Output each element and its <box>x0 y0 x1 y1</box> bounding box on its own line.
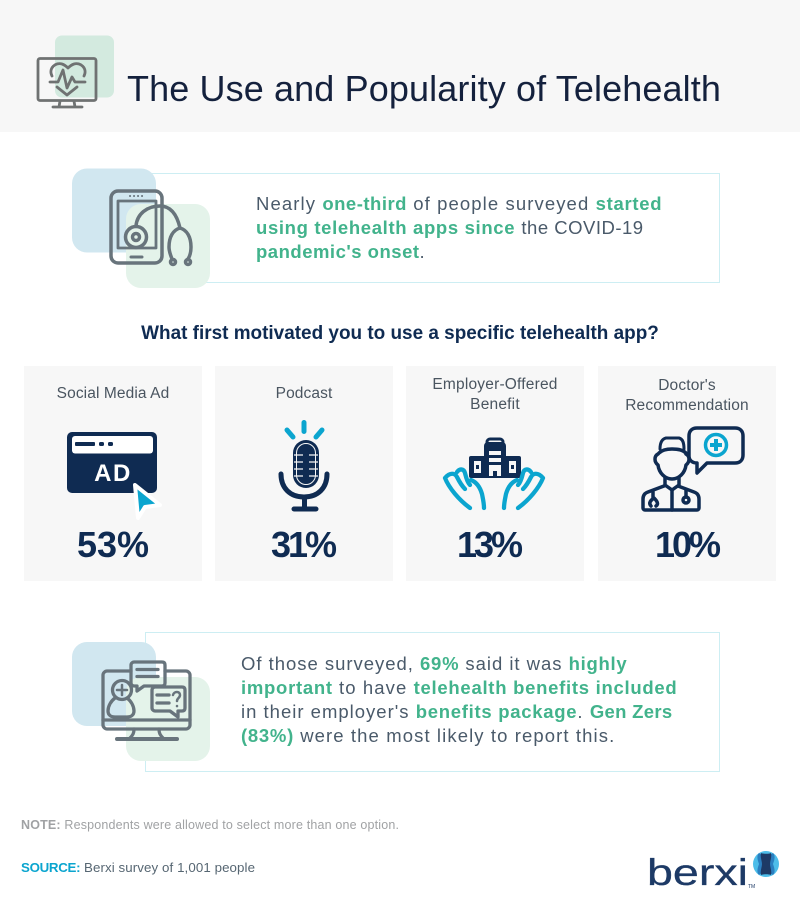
value: 10% <box>655 524 721 565</box>
logo mark <box>753 851 779 877</box>
text: benefits finding <box>241 653 677 746</box>
icon: monitor with chat bubbles <box>72 642 210 761</box>
wordmark: berxi <box>647 852 748 893</box>
icon: monitor with heartbeat <box>36 36 114 108</box>
text: benefits finding: (83%) were the most likely to report this. <box>241 725 615 746</box>
label: Podcast <box>276 385 332 402</box>
label <box>432 376 558 413</box>
label: Social Media Ad <box>57 385 169 402</box>
header band <box>0 0 800 132</box>
text: benefits finding: important to have telehealth benefits included <box>241 677 677 698</box>
icon: ad window with cursor: AD <box>94 460 132 487</box>
value: 31% <box>271 524 337 565</box>
icon: microphone <box>278 420 330 512</box>
label <box>625 377 749 414</box>
label: Employer-Offered <box>432 376 558 393</box>
panel: employer benefits callout <box>72 632 720 772</box>
icon: hands holding building <box>442 438 546 510</box>
panel: one-third callout <box>72 168 720 288</box>
label: Doctor's <box>658 377 716 394</box>
panel: employer-offered benefit <box>406 366 584 581</box>
text: one-third finding <box>256 193 662 262</box>
text: benefits finding: in their employer's benefits package. Gen Zers <box>241 701 672 722</box>
callout border <box>145 632 720 772</box>
panel: doctor's recommendation <box>598 366 776 581</box>
logo: berxi <box>647 851 779 893</box>
heading: motivation question: What first motivated you to use a specific telehealth app? <box>141 323 659 344</box>
panel: podcast <box>215 366 393 581</box>
source: SOURCE: Berxi survey of 1,001 people <box>21 860 255 875</box>
label: Recommendation <box>625 397 749 414</box>
value: 13% <box>457 524 523 565</box>
callout border <box>145 173 720 283</box>
title: The Use and Popularity of Telehealth <box>127 68 721 109</box>
icon: tablet and stethoscope <box>72 168 210 288</box>
icon: doctor with speech bubble <box>641 426 745 512</box>
value: 53% <box>77 524 149 565</box>
trademark: TM <box>748 884 755 890</box>
text: one-third finding: using telehealth apps since the COVID-19 <box>256 217 644 238</box>
panel: social media ad <box>24 366 202 581</box>
text: benefits finding: Of those surveyed, 69% said it was highly <box>241 653 627 674</box>
icon: ad window with cursor <box>67 432 157 512</box>
note: NOTE: Respondents were allowed to select more than one option. <box>21 818 399 832</box>
text: one-third finding: Nearly one-third of people surveyed started <box>256 193 662 214</box>
text: one-third finding: pandemic's onset. <box>256 241 426 262</box>
label: Benefit <box>470 396 520 413</box>
